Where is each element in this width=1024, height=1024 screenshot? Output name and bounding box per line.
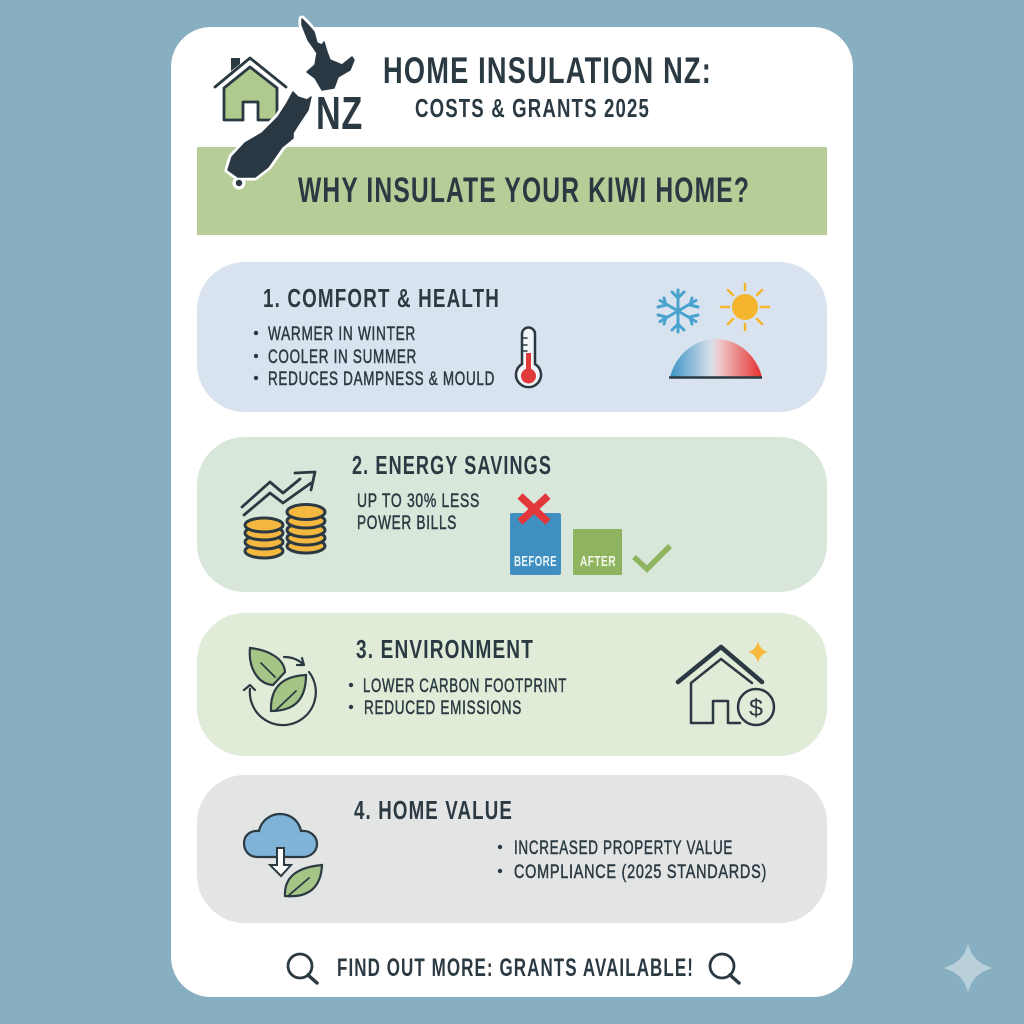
icon: red cross [520, 496, 548, 522]
bar: before [510, 513, 561, 575]
bullet list: home value: COMPLIANCE (2025 STANDARDS) [514, 861, 767, 883]
white card [171, 27, 853, 997]
heading: home value: 4. HOME VALUE [354, 795, 513, 825]
icon: cloud with down arrow [244, 814, 317, 876]
bar: after [573, 529, 622, 575]
icon: magnifier right [710, 954, 739, 983]
icon: thermometer [516, 328, 541, 387]
banner: why insulate [197, 147, 827, 235]
text: power bill savings: UP TO 30% LESS [357, 490, 480, 512]
icon: temperature dome [669, 339, 762, 378]
logo text NZ: NZ [316, 87, 363, 139]
bullet list: home value: INCREASED PROPERTY VALUE [514, 837, 733, 859]
icon: green check [634, 546, 670, 569]
icon: house with dollar coin: $ [749, 695, 763, 722]
bullet list: comfort: WARMER IN WINTER [268, 323, 416, 345]
bullet list: environment: LOWER CARBON FOOTPRINT [363, 675, 567, 697]
icon: sparkle watermark [943, 943, 993, 993]
text: power bill savings: POWER BILLS [357, 512, 457, 534]
dark islands [228, 19, 354, 186]
bullet list: comfort: REDUCES DAMPNESS & MOULD [268, 368, 495, 390]
heading: comfort and health: 1. COMFORT & HEALTH [263, 283, 500, 313]
bar: after: AFTER [580, 553, 616, 570]
panel: comfort and health [197, 262, 827, 412]
bar: before: BEFORE [514, 553, 557, 570]
panel: energy savings [197, 437, 827, 592]
icon: magnifier left [288, 954, 317, 983]
bullet list: home value [498, 837, 767, 883]
white outline [228, 19, 354, 186]
icon: snowflake [658, 290, 698, 332]
bullet list: environment: REDUCED EMISSIONS [364, 697, 522, 719]
heading: environment: 3. ENVIRONMENT [356, 634, 534, 664]
bullet list: environment [349, 675, 567, 719]
bullet list: comfort: COOLER IN SUMMER [268, 346, 417, 368]
icon: map of New Zealand [228, 19, 354, 186]
title: HOME INSULATION NZ: [383, 50, 712, 91]
icon: house logo [215, 58, 286, 120]
icon: sun [721, 284, 769, 330]
panel: home value [197, 775, 827, 923]
banner heading: WHY INSULATE YOUR KIWI HOME? [298, 171, 750, 210]
text: power bill savings [357, 490, 480, 534]
heading: energy savings: 2. ENERGY SAVINGS [352, 450, 552, 480]
footer call to action: FIND OUT MORE: GRANTS AVAILABLE! [337, 954, 694, 982]
bullet list: comfort [254, 323, 495, 390]
icon: house with dollar coin [678, 641, 774, 725]
icon: leaf [285, 865, 322, 896]
icon: growth arrow and coins [242, 472, 325, 558]
panel: environment [197, 613, 827, 756]
subtitle: COSTS & GRANTS 2025 [415, 95, 650, 123]
icon: leaves and cycle [244, 648, 316, 725]
